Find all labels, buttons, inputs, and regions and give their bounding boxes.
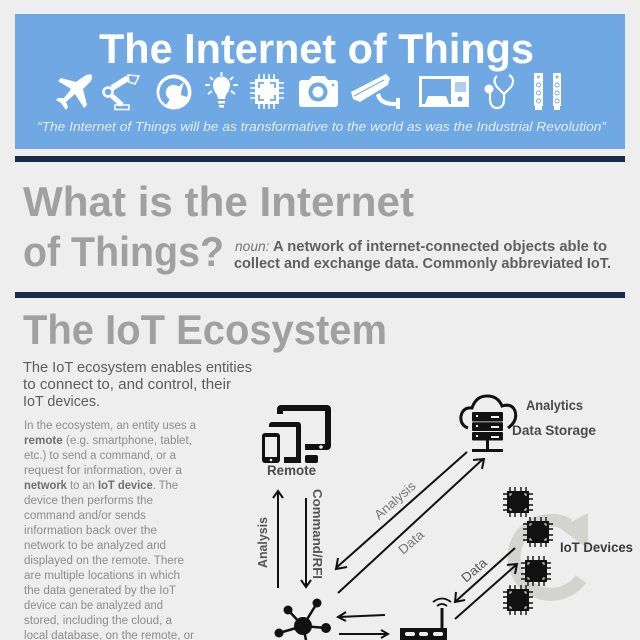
title: The Internet of Things: [99, 25, 534, 72]
icon: cloud server: [461, 396, 516, 452]
icon: security camera: [351, 74, 400, 109]
heading: the iot ecosystem: The IoT Ecosystem: [23, 306, 387, 353]
intro text: The IoT ecosystem enables entities: [23, 359, 252, 376]
heading: what is the internet of things: [23, 178, 414, 275]
icon: network hub: [274, 598, 331, 640]
quote: “The Internet of Things will be as transformative to the world as was the Industrial Revolution”: [37, 119, 607, 134]
body text: network to be analyzed and: [24, 540, 166, 552]
arrow labels: Data: [395, 526, 427, 557]
body text: [24, 420, 197, 640]
intro text: IoT devices.: [23, 393, 100, 410]
icons: iot device chips: [503, 487, 553, 615]
body text: network to an IoT device. The: [24, 480, 178, 492]
body text: information back over the: [24, 525, 157, 537]
icon: microchip: [250, 74, 284, 109]
arrow labels: Command/RFI: [310, 489, 325, 579]
arrows: [273, 452, 517, 638]
icon: gauge: [156, 74, 192, 110]
icon: microwave: [419, 76, 469, 107]
body text: device then performs the: [24, 495, 153, 507]
panel: header banner: [15, 14, 625, 149]
label: remote: Remote: [267, 463, 316, 478]
body text: device can be analyzed and: [24, 600, 163, 612]
recycle arrow graphic: [514, 513, 588, 594]
label: analytics: Analytics: [526, 398, 583, 413]
definition text: noun: A network of internet-connected objects able to: [235, 239, 607, 255]
icon: light bulb: [205, 72, 238, 108]
intro text: [23, 359, 252, 410]
label: iot devices: IoT Devices: [560, 540, 633, 555]
label: data storage: Data Storage: [512, 423, 596, 438]
body text: request for information, over a: [24, 465, 183, 477]
icon: stethoscope: [484, 75, 513, 108]
arrow labels: Analysis: [371, 478, 419, 522]
body text: the data generated by the IoT: [24, 585, 176, 597]
icon: wifi router: [400, 598, 451, 640]
heading: what is the internet of things: of Things?: [23, 228, 224, 275]
body text: remote (e.g. smartphone, tablet,: [24, 435, 192, 447]
divider bar: [15, 156, 625, 162]
body text: In the ecosystem, an entity uses a: [24, 420, 197, 432]
icon: camera: [299, 76, 338, 107]
arrow labels: [255, 478, 490, 585]
arrow labels: Data: [458, 554, 490, 585]
heading: what is the internet of things: What is the Internet: [23, 178, 414, 225]
icon: remote devices: [262, 405, 331, 463]
body text: etc.) to send a command, or a: [24, 450, 177, 462]
icon: speakers: [534, 73, 561, 110]
definition text: [234, 239, 611, 272]
body text: command and/or sends: [24, 510, 146, 522]
divider bar: [15, 292, 625, 298]
arrow labels: Analysis: [255, 517, 270, 568]
icon: airplane: [56, 74, 92, 110]
body text: are multiple locations in which: [24, 570, 180, 582]
definition text: collect and exchange data. Commonly abbreviated IoT.: [234, 256, 611, 272]
icon: robot arm: [104, 75, 139, 110]
intro text: to connect to, and control, their: [23, 376, 231, 393]
body text: displayed on the remote. There: [24, 555, 184, 567]
body text: stored, including the cloud, a: [24, 615, 173, 627]
